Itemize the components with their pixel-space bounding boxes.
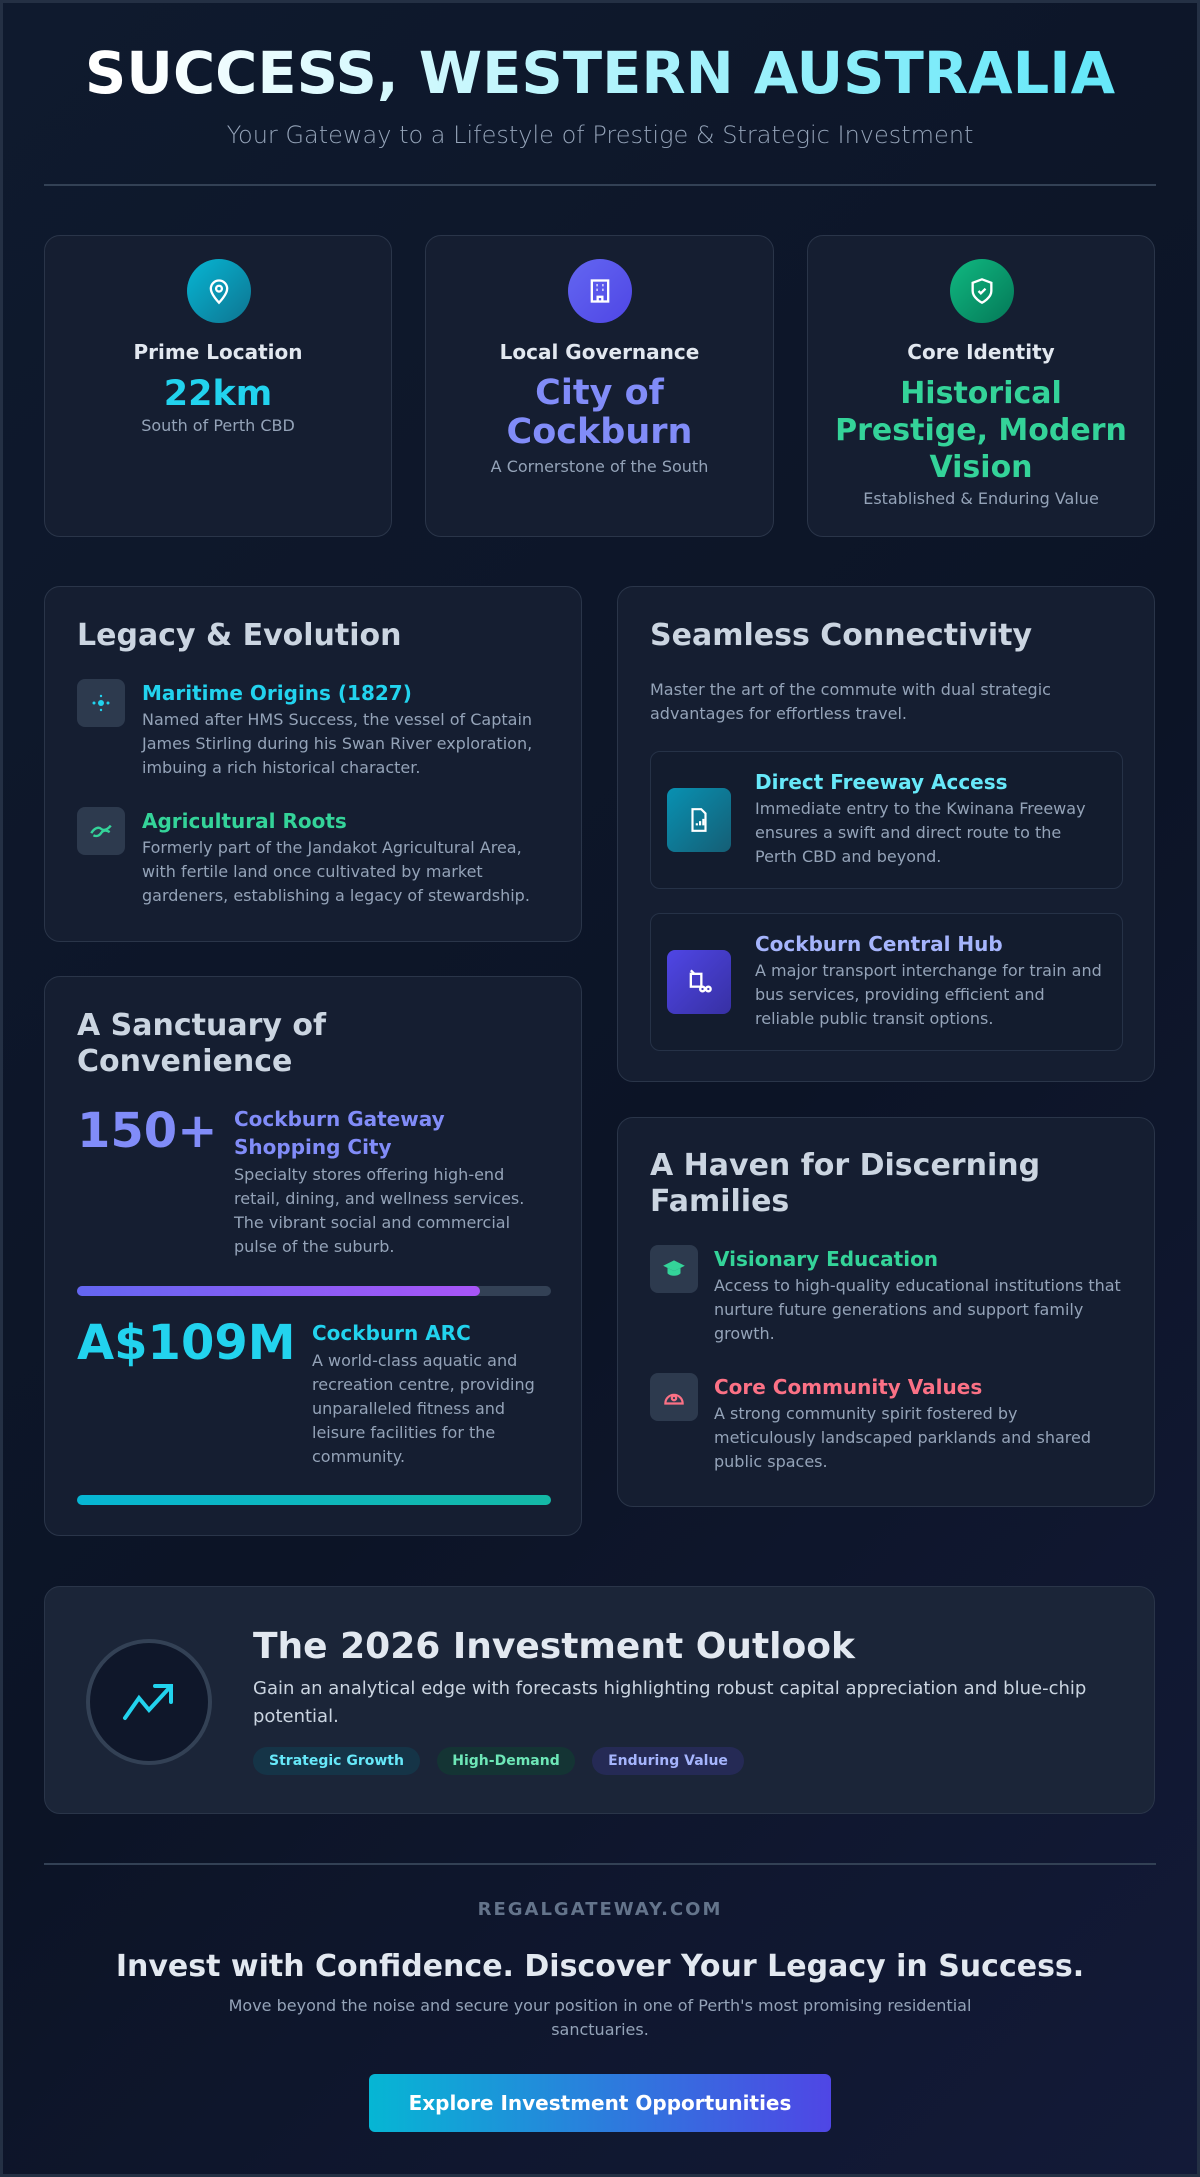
icon: train bbox=[667, 950, 731, 1014]
panel: seamless connectivity bbox=[617, 586, 1155, 1082]
sub-card: central hub: Cockburn Central Hub bbox=[755, 932, 1003, 956]
item: community values: A strong community spirit fostered by meticulously landscaped parklands and shared public spaces. bbox=[714, 1404, 1091, 1471]
heading: A Haven for Discerning bbox=[650, 1148, 1040, 1183]
title: SUCCESS, WESTERN AUSTRALIA bbox=[85, 40, 1115, 107]
description: Gain an analytical edge with forecasts highlighting robust capital appreciation and blue-chip potential. bbox=[253, 1678, 1086, 1727]
panel: core identity bbox=[807, 235, 1155, 537]
progress bar: shopping bbox=[77, 1286, 551, 1296]
icon: trend circle bbox=[86, 1639, 212, 1765]
panel: local governance bbox=[425, 235, 774, 537]
value bbox=[835, 376, 1127, 485]
icon: leaf bbox=[77, 807, 125, 855]
icon: graduation cap bbox=[650, 1245, 698, 1293]
brand: REGALGATEWAY.COM bbox=[478, 1899, 722, 1920]
sub-card: freeway: Immediate entry to the Kwinana Freeway ensures a swift and direct route to the Perth CBD and beyond. bbox=[755, 799, 1086, 866]
item: agricultural roots: Agricultural Roots bbox=[142, 809, 347, 833]
panel: investment outlook bbox=[44, 1586, 1155, 1814]
value: 22km bbox=[164, 374, 272, 414]
item: community values: Core Community Values bbox=[714, 1375, 982, 1399]
item: agricultural roots: Formerly part of the Jandakot Agricultural Area, with fertile land once cultivated by market gardeners, establishing a legacy of stewardship. bbox=[142, 838, 530, 905]
sub text: A Cornerstone of the South bbox=[491, 457, 708, 476]
sub text: South of Perth CBD bbox=[141, 416, 295, 435]
panel: sanctuary of convenience bbox=[44, 976, 582, 1536]
value: Prestige, Modern bbox=[835, 413, 1127, 448]
icon: building bbox=[568, 259, 632, 323]
item: education bbox=[650, 1245, 1121, 1343]
heading: Seamless Connectivity bbox=[650, 618, 1032, 653]
item: maritime origins: Named after HMS Success, the vessel of Captain James Stirling during his Swan River exploration, imbuing a rich historical character. bbox=[142, 710, 532, 777]
value: Cockburn bbox=[507, 412, 692, 452]
panel: legacy & evolution bbox=[44, 586, 582, 942]
panel: haven for families bbox=[617, 1117, 1155, 1507]
intro text: Master the art of the commute with dual strategic advantages for effortless travel. bbox=[650, 680, 1051, 723]
stat: 150+: Specialty stores offering high-end retail, dining, and wellness services. The vibrant social and commercial pulse of the suburb. bbox=[234, 1165, 524, 1256]
value: Historical bbox=[900, 376, 1062, 411]
stat: 150+: 150+ bbox=[77, 1103, 217, 1159]
tags bbox=[253, 1747, 744, 1775]
stat: A$109M: A$109M bbox=[77, 1315, 296, 1371]
label: Local Governance bbox=[500, 340, 699, 364]
icon: freeway bbox=[667, 788, 731, 852]
tags: Enduring Value bbox=[608, 1753, 728, 1769]
stat: A$109M: Cockburn ARC bbox=[312, 1321, 471, 1345]
sub text: Established & Enduring Value bbox=[863, 489, 1099, 508]
value bbox=[507, 373, 692, 452]
heading: The 2026 Investment Outlook bbox=[253, 1626, 855, 1667]
item: agricultural roots bbox=[77, 807, 530, 905]
button: Explore Investment Opportunities bbox=[409, 2091, 791, 2115]
sub-card: central hub bbox=[650, 913, 1123, 1051]
sub-card: central hub: A major transport interchange for train and bus services, providing efficient and reliable public transit options. bbox=[755, 961, 1102, 1028]
heading: Families bbox=[650, 1184, 789, 1219]
heading: Convenience bbox=[77, 1044, 292, 1079]
sub-card: freeway bbox=[650, 751, 1123, 889]
stat: A$109M: A world-class aquatic and recreation centre, providing unparalleled fitness and leisure facilities for the community. bbox=[312, 1351, 535, 1466]
heading bbox=[77, 1008, 326, 1079]
heading: A Sanctuary of bbox=[77, 1008, 326, 1043]
tags: High-Demand bbox=[452, 1753, 560, 1769]
icon: anchor bbox=[77, 679, 125, 727]
stat: 150+: Cockburn Gateway bbox=[234, 1107, 445, 1131]
value: City of bbox=[535, 373, 664, 413]
stat: 150+ bbox=[77, 1103, 524, 1256]
subtitle: Your Gateway to a Lifestyle of Prestige & Strategic Investment bbox=[227, 121, 973, 149]
heading bbox=[650, 1148, 1040, 1219]
value: Vision bbox=[929, 450, 1033, 485]
heading: Legacy & Evolution bbox=[77, 618, 401, 653]
button bbox=[369, 2074, 831, 2132]
item: education: Visionary Education bbox=[714, 1247, 938, 1271]
panel: prime location bbox=[44, 235, 392, 537]
stat: A$109M bbox=[77, 1315, 535, 1466]
stat: 150+: Shopping City bbox=[234, 1135, 392, 1159]
closing heading: Invest with Confidence. Discover Your Legacy in Success. bbox=[116, 1949, 1084, 1984]
item: maritime origins bbox=[77, 679, 532, 777]
progress bar: arc bbox=[77, 1495, 551, 1505]
tags: Strategic Growth bbox=[269, 1753, 404, 1769]
label: Prime Location bbox=[134, 340, 302, 364]
sub-card: freeway: Direct Freeway Access bbox=[755, 770, 1008, 794]
item: community values bbox=[650, 1373, 1091, 1471]
icon: community bbox=[650, 1373, 698, 1421]
icon: location pin bbox=[187, 259, 251, 323]
closing text: Move beyond the noise and secure your position in one of Perth's most promising residential sanctuaries. bbox=[229, 1996, 971, 2039]
item: education: Access to high-quality educational institutions that nurture future generations and support family growth. bbox=[714, 1276, 1121, 1343]
item: maritime origins: Maritime Origins (1827) bbox=[142, 681, 412, 705]
icon: shield bbox=[950, 259, 1014, 323]
label: Core Identity bbox=[907, 340, 1055, 364]
